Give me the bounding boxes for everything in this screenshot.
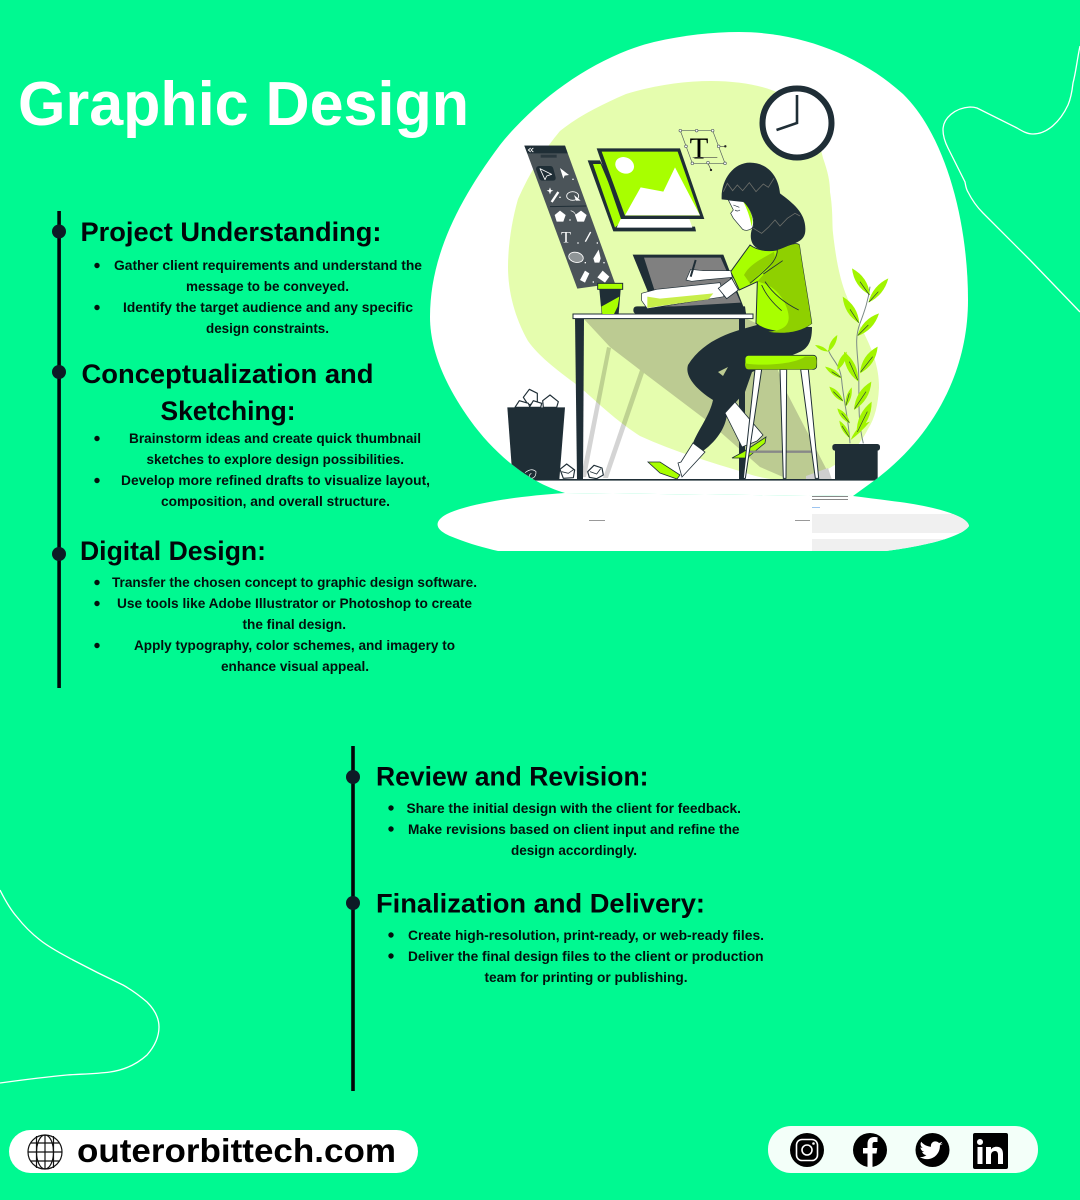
step: Conceptualization and Sketching: Conceptualization and bbox=[82, 359, 374, 389]
step: Conceptualization and Sketching bbox=[82, 359, 430, 509]
step: Project Understanding: Gather client requirements and understand the bbox=[114, 257, 422, 273]
arms and hands bbox=[642, 260, 738, 309]
step: Finalization and Delivery: Finalization and Delivery: bbox=[376, 888, 705, 918]
tablet bbox=[633, 255, 746, 314]
clock bbox=[762, 88, 832, 158]
step: Finalization and Delivery: Deliver the final design files to the client or production bbox=[408, 948, 764, 964]
pants bbox=[687, 325, 812, 451]
icon: instagram bbox=[790, 1133, 824, 1167]
light green backdrop shape bbox=[508, 81, 879, 480]
step: Review and Revision: Share the initial design with the client for feedback. bbox=[406, 800, 741, 816]
timeline bar bbox=[351, 746, 355, 1091]
step: Digital Design: Digital Design: bbox=[80, 536, 266, 566]
white blob behind illustration bbox=[430, 32, 968, 496]
coffee cup bbox=[598, 283, 623, 314]
social icons pill bbox=[768, 1126, 1038, 1173]
text tool selection box: T bbox=[690, 131, 709, 165]
step: Conceptualization and Sketching: Sketching: bbox=[160, 396, 296, 426]
stool bbox=[743, 355, 819, 478]
desk shadow bbox=[583, 318, 832, 480]
selected tool bbox=[536, 166, 556, 181]
step: Finalization and Delivery: team for printing or publishing. bbox=[484, 969, 688, 985]
icon: twitter bbox=[916, 1133, 950, 1167]
step: Review and Revision: Make revisions based on client input and refine the bbox=[408, 821, 740, 837]
step: Project Understanding bbox=[80, 217, 422, 336]
icon: linkedin bbox=[973, 1133, 1008, 1169]
step: Digital Design: Apply typography, color schemes, and imagery to bbox=[134, 637, 455, 653]
decorative curve: top right bbox=[943, 46, 1080, 312]
step: Digital Design: Use tools like Adobe Illustrator or Photoshop to create bbox=[117, 595, 472, 611]
step: Digital Design: Transfer the chosen concept to graphic design software. bbox=[112, 574, 477, 590]
step: Project Understanding: Project Understanding: bbox=[80, 217, 382, 247]
desk bbox=[573, 314, 753, 480]
step: Conceptualization and Sketching: Develop more refined drafts to visualize layout, bbox=[121, 472, 430, 488]
step: Finalization and Delivery bbox=[376, 888, 764, 985]
step: Project Understanding: message to be conveyed. bbox=[186, 278, 349, 294]
far leg and shoes bbox=[648, 402, 766, 479]
step: Digital Design: enhance visual appeal. bbox=[221, 658, 369, 674]
image frames bbox=[588, 148, 704, 231]
step: Project Understanding: design constraints. bbox=[206, 320, 329, 336]
floor line bbox=[514, 479, 876, 481]
step: Conceptualization and Sketching: Brainstorm ideas and create quick thumbnail bbox=[129, 430, 421, 446]
decorative curve: bottom left bbox=[0, 890, 159, 1083]
head and hair bbox=[722, 163, 805, 251]
text tool selection box bbox=[679, 129, 726, 171]
shirt bbox=[731, 244, 812, 333]
tool panel: T bbox=[561, 230, 571, 247]
step: Finalization and Delivery: Create high-resolution, print-ready, or web-ready files. bbox=[408, 927, 764, 943]
tool panel bbox=[524, 146, 615, 289]
step: Digital Design: the final design. bbox=[242, 616, 346, 632]
website address: outerorbittech.com bbox=[77, 1132, 396, 1169]
step: Review and Revision bbox=[376, 762, 741, 858]
icon: facebook bbox=[853, 1133, 887, 1167]
illustration: designer at drawing tablet bbox=[507, 81, 888, 481]
thin floor shadows bbox=[581, 347, 644, 478]
shadow sliver beyond backdrop bbox=[806, 468, 832, 479]
timeline bar bbox=[57, 211, 61, 688]
step: Review and Revision: design accordingly. bbox=[511, 842, 637, 858]
title: Graphic Design bbox=[18, 70, 469, 139]
panel: lower steps timeline bbox=[346, 746, 764, 1091]
potted plant bbox=[815, 268, 888, 479]
step: Project Understanding: Identify the target audience and any specific bbox=[123, 299, 413, 315]
icon: globe bbox=[28, 1135, 62, 1169]
step: Digital Design bbox=[80, 536, 477, 674]
step: Review and Revision: Review and Revision: bbox=[376, 762, 648, 792]
gap under knee bbox=[718, 367, 728, 376]
trash can with paper bbox=[507, 389, 603, 480]
timeline markers bbox=[52, 224, 66, 561]
step: Conceptualization and Sketching: composition, and overall structure. bbox=[161, 493, 390, 509]
panel: upper steps timeline bbox=[52, 211, 477, 688]
white ellipse base with faint artefacts bbox=[430, 490, 975, 552]
website pill bbox=[9, 1130, 418, 1173]
timeline markers bbox=[346, 770, 360, 910]
step: Conceptualization and Sketching: sketches to explore design possibilities. bbox=[146, 451, 404, 467]
